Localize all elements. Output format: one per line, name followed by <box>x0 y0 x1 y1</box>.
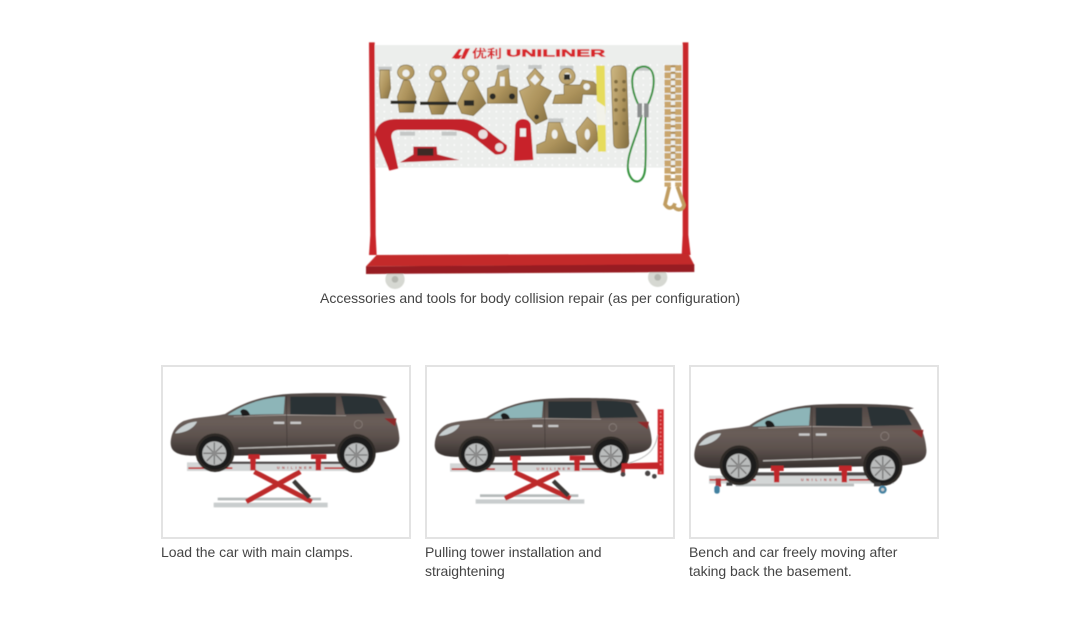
upper bench rail <box>187 462 368 471</box>
caption: pulling tower: Pulling tower installation and straightening <box>425 544 602 579</box>
yellow strap <box>596 66 606 152</box>
vehicle <box>694 404 926 486</box>
red clamp <box>514 119 533 161</box>
casters <box>714 478 887 494</box>
pulling tower <box>621 409 664 479</box>
vehicle <box>435 398 652 473</box>
scissor lift <box>214 472 328 507</box>
bench brand: UNILINER <box>277 466 312 470</box>
logo: UNILINER <box>506 49 605 60</box>
icon: logo mark <box>452 48 470 59</box>
scissor lift <box>476 472 584 504</box>
base tray <box>366 254 694 274</box>
panel: pulling tower <box>425 365 675 539</box>
panel: load the car <box>161 365 411 539</box>
red wedge tool <box>400 147 459 162</box>
gold chain with hooks <box>665 65 684 210</box>
frame posts <box>369 42 691 255</box>
cable ferrules <box>637 103 649 117</box>
upper bench rail <box>450 463 625 472</box>
logo <box>452 46 605 60</box>
panel: tool board photo <box>365 42 696 290</box>
caption: load the car: Load the car with main clamps. <box>161 544 353 560</box>
perforated board <box>375 45 682 168</box>
red pulling arm <box>375 119 507 171</box>
caption: tool board: Accessories and tools for body collision repair (as per configuration) <box>320 290 740 306</box>
bench brand: UNILINER <box>537 467 570 471</box>
main clamps <box>248 454 326 470</box>
bench brand: UNILINER <box>801 478 837 482</box>
clamp details <box>402 70 590 140</box>
vehicle <box>171 393 399 473</box>
board hangers <box>378 65 649 136</box>
brand wordmark: 优利 <box>472 46 502 60</box>
upper bench rail <box>709 472 894 486</box>
panel: bench moving <box>689 365 939 539</box>
caption: bench moving: Bench and car freely moving after taking back the basement. <box>689 544 897 579</box>
gold clamps <box>379 65 629 153</box>
icon: casters <box>385 268 667 289</box>
green cable sling <box>628 66 654 181</box>
main clamps <box>510 456 585 471</box>
main clamps <box>771 466 852 482</box>
